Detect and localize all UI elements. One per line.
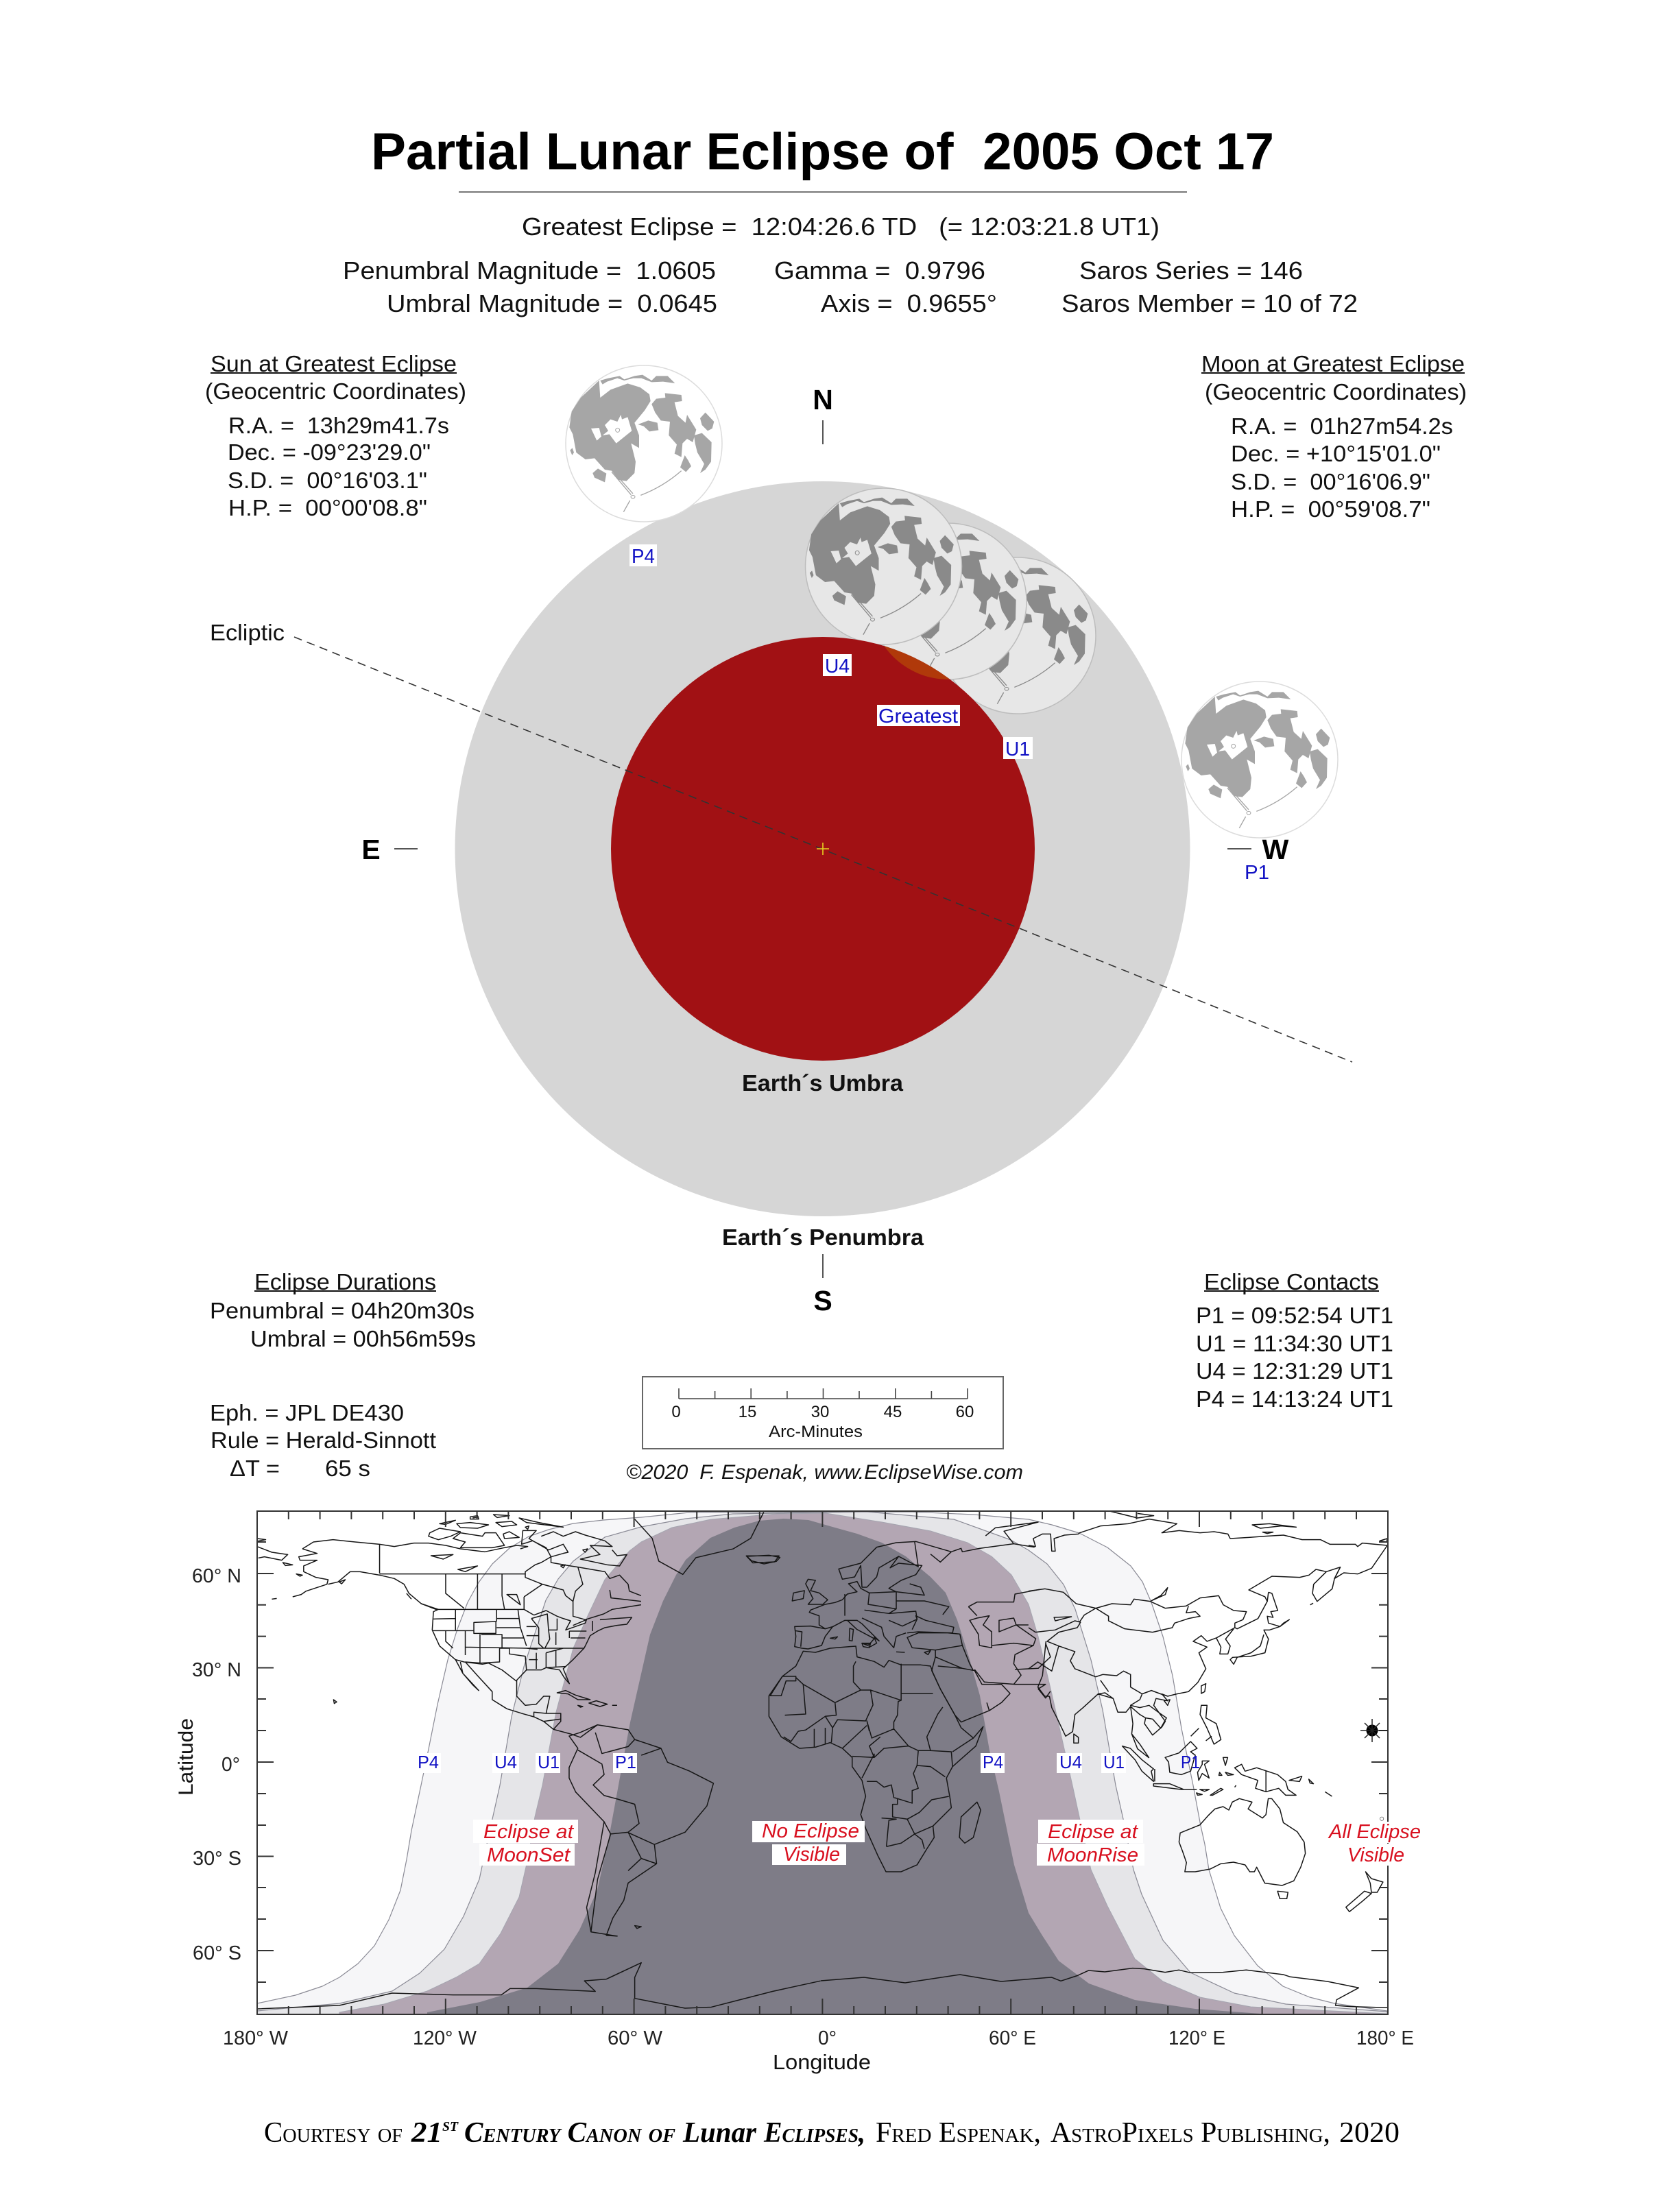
map label: eclipse at moonrise: Eclipse at bbox=[1048, 1821, 1139, 1843]
scale bar: 30 bbox=[811, 1403, 829, 1421]
map labels: contact curves west bbox=[416, 1752, 637, 1773]
eclipse parameters bbox=[343, 256, 1358, 317]
panel: moon at greatest eclipse: Moon at Greatest Eclipse bbox=[1201, 351, 1465, 376]
map labels: contact curves west: U1 bbox=[538, 1752, 560, 1772]
map: coastlines of East and South Asia bbox=[1029, 1511, 1387, 1758]
map labels: contact curves east: P1 bbox=[1181, 1752, 1200, 1772]
map axis: latitude labels: 60° S bbox=[193, 1942, 241, 1964]
eclipse parameters: Penumbral Magnitude = 1.0605 bbox=[343, 256, 716, 285]
panel: moon at greatest eclipse: H.P. = 00°59'08.7" bbox=[1231, 496, 1430, 522]
moon at P4 bbox=[566, 365, 722, 522]
panel: eclipse contacts: U4 = 12:31:29 UT1 bbox=[1196, 1358, 1393, 1384]
moon at P1 bbox=[1181, 682, 1338, 838]
map axis: longitude labels: 60° W bbox=[608, 2027, 662, 2049]
map axis: longitude labels: 120° E bbox=[1168, 2027, 1225, 2049]
panel: eclipse contacts: U1 = 11:34:30 UT1 bbox=[1196, 1331, 1393, 1356]
map labels: contact curves east: P4 bbox=[983, 1752, 1003, 1772]
footer credit: Century Canon of bbox=[464, 2117, 675, 2149]
map axis: longitude labels: 0° bbox=[818, 2027, 837, 2049]
map label: eclipse at moonrise bbox=[1037, 1820, 1144, 1866]
label: P4: P4 bbox=[632, 546, 655, 568]
map labels: contact curves west: P1 bbox=[615, 1752, 636, 1772]
map label: no eclipse visible: No Eclipse bbox=[762, 1820, 859, 1842]
panel: sun at greatest eclipse: S.D. = 00°16'03.1" bbox=[228, 468, 427, 493]
label: U1: U1 bbox=[1005, 738, 1030, 760]
panel: moon at greatest eclipse: R.A. = 01h27m54.2s bbox=[1231, 413, 1453, 439]
panel: sun at greatest eclipse: H.P. = 00°00'08.8" bbox=[228, 495, 427, 520]
direction S: S bbox=[813, 1285, 832, 1316]
map labels: contact curves west: U4 bbox=[494, 1752, 517, 1772]
map axis: longitude labels: 120° W bbox=[413, 2027, 477, 2049]
map labels: contact curves west: P4 bbox=[418, 1752, 439, 1772]
direction W bbox=[1227, 834, 1289, 865]
map axis: longitude labels: 60° E bbox=[989, 2027, 1036, 2049]
map panel bbox=[257, 1511, 1388, 2014]
map label: all eclipse visible: All Eclipse bbox=[1328, 1821, 1421, 1843]
eclipse diagram bbox=[294, 365, 1352, 1216]
eclipse parameters: Saros Series = 146 bbox=[1079, 256, 1303, 285]
panel: moon at greatest eclipse: (Geocentric Coordinates) bbox=[1205, 379, 1467, 405]
map label: all eclipse visible bbox=[1325, 1821, 1424, 1866]
scale bar: 0 bbox=[671, 1403, 681, 1421]
map label: eclipse at moonrise: MoonRise bbox=[1047, 1844, 1138, 1866]
direction W: W bbox=[1262, 834, 1289, 865]
panel: sun at greatest eclipse: (Geocentric Coordinates) bbox=[205, 378, 466, 404]
panel: eclipse contacts: P1 = 09:52:54 UT1 bbox=[1196, 1303, 1393, 1328]
map axis: latitude labels: 0° bbox=[221, 1754, 240, 1776]
map: coastlines of South America and Antarctica west bbox=[257, 1512, 821, 2009]
map label: eclipse at moonset: MoonSet bbox=[487, 1844, 571, 1866]
panel: moon at greatest eclipse bbox=[1201, 351, 1467, 522]
map: coastlines of Southeast Asia, Oceania and Antarctica east bbox=[1042, 1741, 1388, 2008]
label: U4: U4 bbox=[825, 655, 850, 677]
greatest eclipse time: Greatest Eclipse = 12:04:26.6 TD (= 12:03:21.8 UT1) bbox=[522, 213, 1160, 241]
map axis: latitude labels: 60° N bbox=[192, 1565, 241, 1587]
footer credit: AstroPixels Publishing, bbox=[1051, 2117, 1330, 2149]
footer credit: 2020 bbox=[1339, 2117, 1400, 2149]
panel: eclipse durations: Penumbral = 04h20m30s bbox=[210, 1298, 475, 1323]
map label: no eclipse visible bbox=[752, 1820, 865, 1866]
panel: moon at greatest eclipse: Dec. = +10°15'01.0" bbox=[1231, 441, 1441, 466]
label: earth's penumbra: Earth´s Penumbra bbox=[722, 1225, 924, 1250]
label: ecliptic: Ecliptic bbox=[210, 620, 285, 645]
panel: moon at greatest eclipse: S.D. = 00°16'06.9" bbox=[1231, 469, 1430, 494]
map axis: latitude labels bbox=[175, 1565, 241, 1964]
panel: sun at greatest eclipse: Dec. = -09°23'29.0" bbox=[228, 439, 431, 465]
panel: ephemeris: ΔT = bbox=[230, 1456, 280, 1481]
eclipse parameters: Umbral Magnitude = 0.0645 bbox=[387, 289, 717, 317]
panel: ephemeris: Eph. = JPL DE430 bbox=[210, 1400, 404, 1425]
map: eclipse visibility zones bbox=[257, 1512, 1387, 2014]
eclipse parameters: Axis = 0.9655° bbox=[821, 289, 997, 317]
map axis: latitude labels: Latitude bbox=[175, 1718, 197, 1796]
map labels: contact curves east: U1 bbox=[1103, 1752, 1125, 1772]
panel: eclipse contacts bbox=[1196, 1269, 1393, 1412]
panel: eclipse durations: Umbral = 00h56m59s bbox=[250, 1326, 476, 1351]
direction N bbox=[813, 384, 833, 444]
title: Partial Lunar Eclipse of 2005 Oct 17 bbox=[371, 123, 1274, 181]
map: coastlines of Europe, Africa and the Middle East bbox=[747, 1522, 1051, 1872]
centre cross bbox=[817, 843, 829, 855]
panel: ephemeris: 65 s bbox=[325, 1456, 370, 1481]
footer credit bbox=[264, 2117, 1400, 2149]
map: Antarctic coast link bbox=[821, 1975, 1042, 1983]
scale bar: 15 bbox=[739, 1403, 756, 1421]
copyright: ©2020 F. Espenak, www.EclipseWise.com bbox=[626, 1461, 1023, 1484]
scale bar: 45 bbox=[884, 1403, 902, 1421]
panel: sun at greatest eclipse: R.A. = 13h29m41.7s bbox=[228, 413, 449, 438]
map: frame and ticks bbox=[257, 1511, 1388, 2014]
map axis: latitude labels: 30° N bbox=[192, 1659, 241, 1681]
penumbra disc bbox=[455, 481, 1190, 1216]
direction S bbox=[813, 1254, 832, 1316]
moon at U4 bbox=[805, 488, 961, 644]
footer credit: Lunar bbox=[682, 2117, 757, 2149]
scale bar: Arc-Minutes bbox=[769, 1423, 863, 1441]
scale bar bbox=[643, 1377, 1003, 1449]
map axis: longitude labels: 180° E bbox=[1356, 2027, 1414, 2049]
label: greatest: Greatest bbox=[878, 706, 958, 727]
moon at greatest eclipse bbox=[870, 523, 1027, 679]
panel: eclipse contacts: P4 = 14:13:24 UT1 bbox=[1196, 1386, 1393, 1412]
panel: eclipse contacts: Eclipse Contacts bbox=[1204, 1269, 1379, 1294]
panel: eclipse durations: Eclipse Durations bbox=[254, 1269, 436, 1294]
moon at U1 bbox=[939, 557, 1096, 714]
footer credit: Eclipses, bbox=[763, 2117, 865, 2149]
panel: sun at greatest eclipse bbox=[205, 351, 466, 520]
map axis: longitude labels: Longitude bbox=[773, 2050, 871, 2074]
map label: no eclipse visible: Visible bbox=[783, 1844, 840, 1866]
map axis: longitude labels: 180° W bbox=[223, 2027, 288, 2049]
map: coastlines of North America bbox=[257, 1515, 641, 1737]
direction N: N bbox=[813, 384, 833, 415]
map labels: contact curves east bbox=[981, 1752, 1200, 1773]
footer credit: Fred Espenak, bbox=[876, 2117, 1041, 2149]
panel: sun at greatest eclipse: Sun at Greatest Eclipse bbox=[211, 351, 457, 376]
direction E: E bbox=[361, 834, 381, 865]
panel: eclipse durations bbox=[210, 1269, 476, 1351]
panel: ephemeris: Rule = Herald-Sinnott bbox=[211, 1427, 436, 1453]
footer credit: 21 bbox=[411, 2117, 442, 2149]
map label: eclipse at moonset bbox=[473, 1820, 578, 1866]
scale bar: 60 bbox=[956, 1403, 974, 1421]
map label: all eclipse visible: Visible bbox=[1347, 1844, 1404, 1866]
eclipse parameters: Saros Member = 10 of 72 bbox=[1061, 289, 1358, 317]
map axis: longitude labels bbox=[223, 2027, 1414, 2074]
panel: ephemeris bbox=[210, 1400, 436, 1481]
footer credit: ST bbox=[442, 2119, 459, 2134]
eclipse parameters: Gamma = 0.9796 bbox=[774, 256, 985, 285]
umbral overlap with moon bbox=[885, 646, 950, 679]
umbra disc bbox=[611, 637, 1035, 1061]
map axis: latitude labels: 30° S bbox=[193, 1848, 241, 1870]
ecliptic line bbox=[294, 637, 1352, 1062]
icon: sub-solar sun marker bbox=[1360, 1719, 1388, 1742]
direction E bbox=[361, 834, 418, 865]
label: P1: P1 bbox=[1245, 862, 1269, 884]
map label: eclipse at moonset: Eclipse at bbox=[483, 1821, 575, 1843]
label: earth's umbra: Earth´s Umbra bbox=[742, 1070, 904, 1096]
map labels: contact curves east: U4 bbox=[1059, 1752, 1082, 1772]
footer credit: Courtesy of bbox=[264, 2117, 403, 2149]
